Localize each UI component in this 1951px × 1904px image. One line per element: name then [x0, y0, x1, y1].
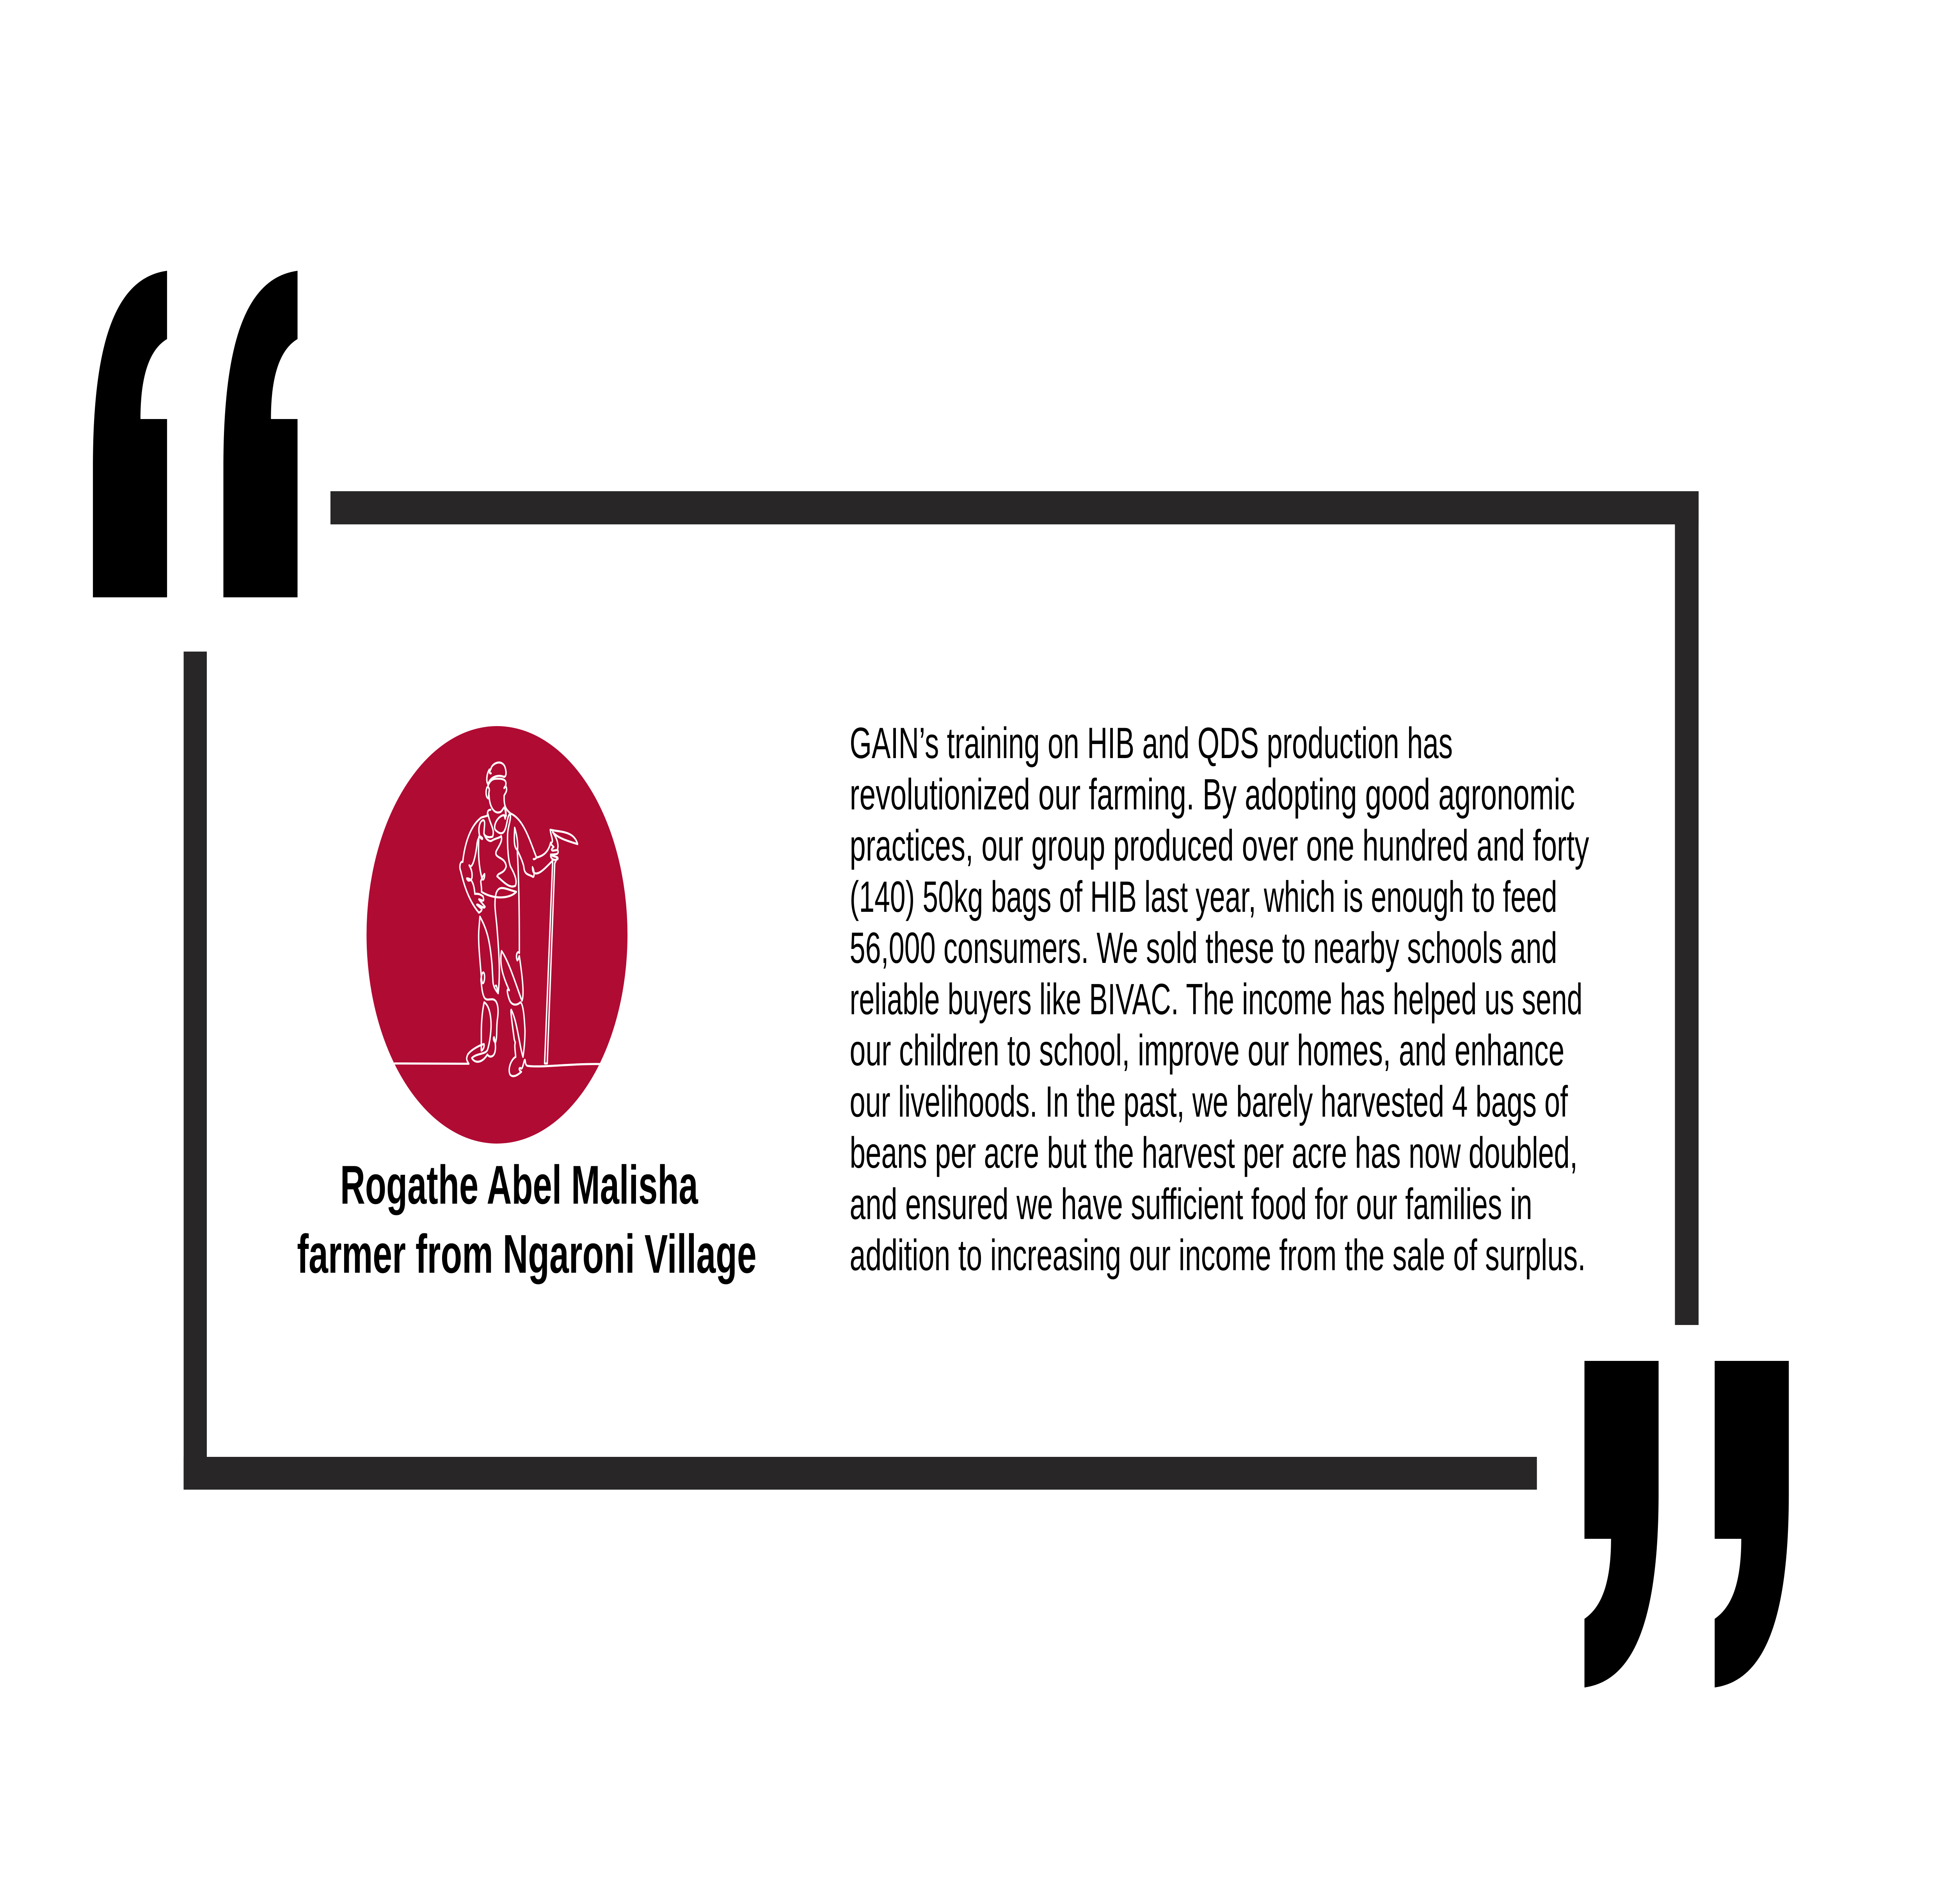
testimonial quote text: addition to increasing our income from the sale of surplus. [850, 1231, 1586, 1279]
testimonial quote text: GAIN’s training on HIB and QDS production has [850, 718, 1453, 767]
testimonial quote text: beans per acre but the harvest per acre has now doubled, [850, 1128, 1578, 1177]
icon: farmer portrait [366, 726, 627, 1144]
farmer name and role: Rogathe Abel Malisha [340, 1154, 698, 1215]
farmer name and role: farmer from Ngaroni Village [297, 1223, 757, 1284]
icon: opening quotation mark [93, 271, 297, 597]
testimonial quote text: our children to school, improve our homes, and enhance [850, 1026, 1564, 1075]
testimonial quote text: (140) 50kg bags of HIB last year, which is enough to feed [850, 872, 1557, 921]
quote frame [184, 491, 1699, 1490]
testimonial quote text: revolutionized our farming. By adopting good agronomic [850, 769, 1575, 819]
testimonial quote text [850, 718, 1589, 1279]
line drawing of farmer with hoe [394, 762, 600, 1076]
testimonial quote text: 56,000 consumers. We sold these to nearby schools and [850, 923, 1557, 972]
testimonial quote text: practices, our group produced over one hundred and forty [850, 821, 1589, 870]
testimonial quote text: reliable buyers like BIVAC. The income has helped us send [850, 974, 1583, 1023]
icon: closing quotation mark [1585, 1361, 1789, 1687]
testimonial quote text: our livelihoods. In the past, we barely harvested 4 bags of [850, 1077, 1568, 1126]
testimonial quote text: and ensured we have sufficient food for our families in [850, 1179, 1532, 1228]
farmer name and role [297, 1154, 757, 1284]
portrait circle [366, 726, 627, 1144]
